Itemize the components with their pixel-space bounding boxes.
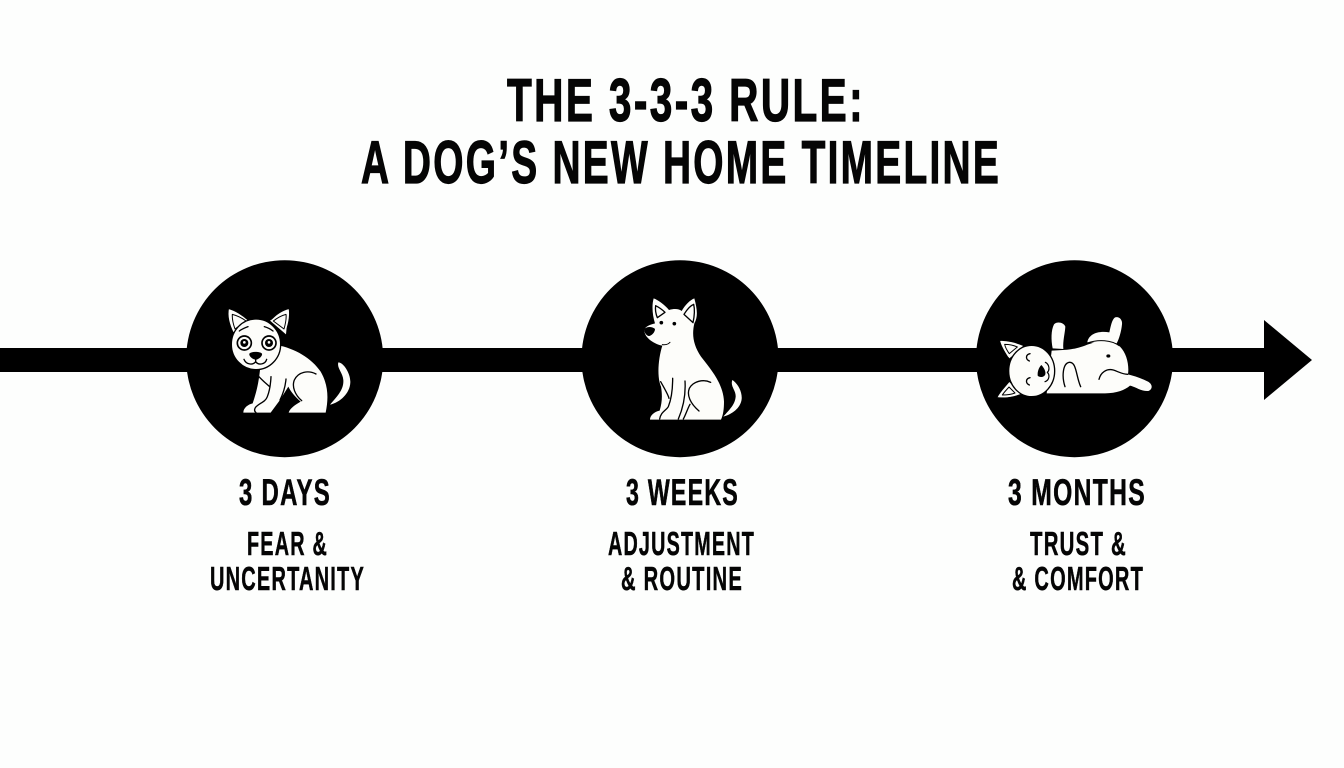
description: adjustment and routine — [608, 525, 755, 597]
description: trust and comfort: TRUST & — [1030, 525, 1127, 562]
timeline arrow — [0, 320, 1312, 400]
stage: 3 months — [976, 260, 1173, 597]
circle: 3 months — [976, 260, 1173, 457]
title: A DOG’S NEW HOME TIMELINE — [361, 129, 1001, 196]
description: fear and uncertainty: UNCERTANITY — [210, 560, 365, 597]
label: 3 months: 3 MONTHS — [1008, 472, 1146, 513]
label: 3 weeks: 3 WEEKS — [626, 472, 739, 513]
circle: 3 weeks — [582, 260, 778, 457]
description: adjustment and routine: ADJUSTMENT — [608, 525, 755, 562]
description: trust and comfort: & COMFORT — [1012, 560, 1144, 597]
icon: sitting dog — [644, 298, 742, 420]
icon: relaxed dog on back — [997, 317, 1152, 398]
label: 3 days: 3 DAYS — [239, 472, 331, 513]
title: THE 3-3-3 RULE: — [507, 67, 865, 134]
description: trust and comfort — [1012, 525, 1144, 597]
icon: fearful dog — [228, 308, 350, 413]
stage: 3 weeks — [582, 260, 778, 597]
description: fear and uncertainty: FEAR & — [247, 525, 328, 562]
title — [361, 67, 1001, 196]
stage: 3 days — [186, 260, 383, 597]
description: adjustment and routine: & ROUTINE — [621, 560, 743, 597]
description: fear and uncertainty — [210, 525, 365, 597]
circle: 3 days — [186, 260, 383, 457]
